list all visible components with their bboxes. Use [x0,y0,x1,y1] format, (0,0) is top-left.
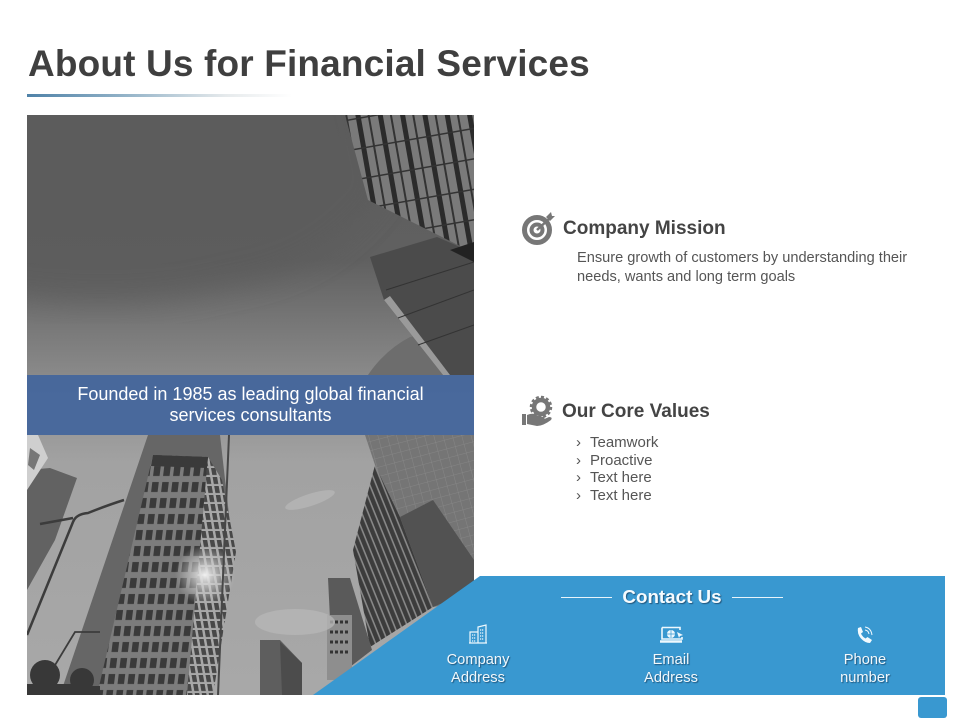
trees [27,660,100,695]
company address: Company [447,652,509,668]
panel: contact us [313,576,945,695]
value items: Teamwork [590,434,658,451]
values list [576,434,658,504]
caption text: services consultants [169,405,332,425]
caption band [27,375,474,435]
value items: › [576,452,581,469]
contact heading: Contact Us [622,586,722,607]
value items: Text here [590,469,652,486]
icon: target [522,212,555,245]
right buildings [353,435,474,647]
value items: › [576,469,581,486]
sky [27,115,474,695]
heading: company mission: Company Mission [563,218,726,239]
main tower background [60,435,233,695]
dark cloud [0,80,385,301]
value items: › [576,434,581,451]
company address: Address [451,670,505,686]
photo: skyscrapers [27,115,474,695]
street lamps [27,500,124,690]
value items: Proactive [590,452,653,469]
title underline [27,94,292,97]
value items: Text here [590,487,652,504]
mast and poles [218,435,229,695]
distant towers [260,578,372,695]
value items [576,434,658,504]
left buildings [27,435,77,590]
clouds [255,486,337,635]
value items: › [576,487,581,504]
title: About Us for Financial Services [28,43,590,84]
main tower [97,455,236,695]
phone number [841,653,892,684]
icon: laptop globe [660,626,683,643]
email address [644,653,699,684]
mission text: needs, wants and long term goals [577,269,795,285]
email address: Email [653,652,689,668]
heading: core values: Our Core Values [562,401,710,422]
email address: Address [644,670,698,686]
upper right buildings [345,115,474,375]
icon: gear in hand [522,396,552,426]
caption text [77,384,424,425]
mission text: Ensure growth of customers by understanding their [577,250,907,266]
icon: building [469,624,487,644]
company address [447,654,511,684]
phone number: Phone [844,652,886,668]
contact heading rules [561,597,612,598]
caption text: Founded in 1985 as leading global financial [77,384,424,404]
mission text [577,250,907,285]
icon: phone [858,626,872,643]
phone number: number [840,670,890,686]
page number badge [918,697,947,718]
